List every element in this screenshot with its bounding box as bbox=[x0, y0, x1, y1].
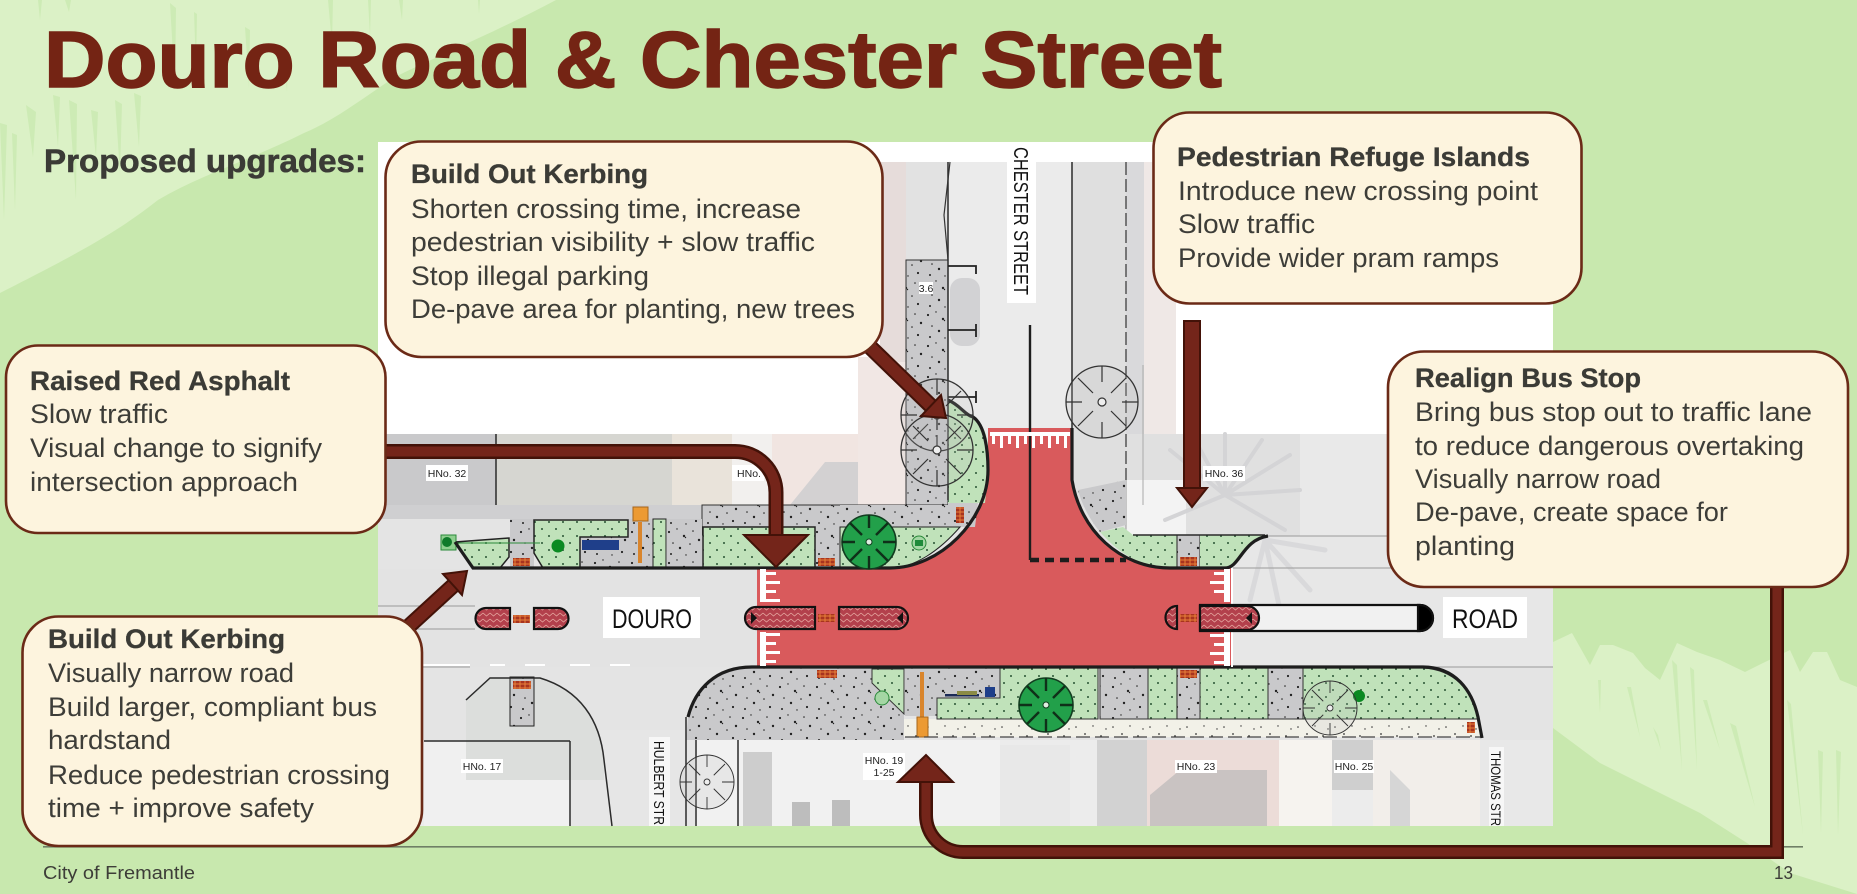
panel: raised red asphalt bbox=[6, 346, 386, 533]
panel: realign bus stop: to reduce dangerous overtaking bbox=[1415, 431, 1804, 461]
plan: aerial photo base bbox=[378, 162, 1553, 826]
panel: build out kerbing, lower: Reduce pedestrian crossing bbox=[48, 760, 390, 790]
label: DOURO: DOURO bbox=[612, 604, 692, 634]
panel: raised red asphalt: intersection approach bbox=[30, 467, 298, 497]
arrow: refuge islands bbox=[1177, 321, 1207, 507]
arrow: upper kerbing build out bbox=[868, 345, 946, 418]
label: CHESTER STREET bbox=[1007, 142, 1036, 303]
panel: pedestrian refuge islands: Pedestrian Refuge Islands bbox=[1177, 142, 1530, 172]
panel: raised red asphalt: Visual change to signify bbox=[30, 433, 323, 463]
panel: pedestrian refuge islands: Provide wider pram ramps bbox=[1178, 243, 1499, 273]
decorative light shape: top left foliage bbox=[0, 0, 556, 293]
label: house numbers: HNo. 17 bbox=[463, 761, 501, 773]
plan: kerb lines bbox=[455, 162, 1482, 738]
panel: pedestrian refuge islands: Introduce new crossing point bbox=[1178, 176, 1539, 206]
footer rule bbox=[43, 846, 1803, 848]
panel: build out kerbing, upper: Stop illegal parking bbox=[411, 261, 649, 291]
panel: build out kerbing, lower: hardstand bbox=[48, 725, 171, 755]
panel: build out kerbing, upper: Shorten crossing time, increase bbox=[411, 194, 801, 224]
label: house numbers: HNo. 23 bbox=[1177, 761, 1215, 773]
arrow: bus stop realignment bbox=[898, 580, 1777, 852]
panel: build out kerbing, lower bbox=[22, 616, 422, 846]
label: HULBERT STREET bbox=[649, 737, 670, 826]
panel: realign bus stop: Realign Bus Stop bbox=[1415, 363, 1641, 393]
panel: realign bus stop: planting bbox=[1415, 531, 1515, 561]
panel: raised red asphalt: Raised Red Asphalt bbox=[30, 366, 290, 396]
label: house numbers: 3.6 bbox=[919, 283, 933, 295]
plan: centre median bbox=[745, 607, 908, 629]
panel: build out kerbing, lower: Build Out Kerbing bbox=[48, 624, 285, 654]
plan: white sheet bbox=[378, 142, 1553, 826]
intersection plan bbox=[378, 142, 1553, 826]
panel: build out kerbing, lower: time + improve safety bbox=[48, 793, 315, 823]
label: house numbers bbox=[426, 282, 1374, 780]
label: house numbers: 1-25 bbox=[873, 767, 895, 779]
plan: red asphalt intersection bbox=[757, 428, 1231, 667]
plan: north-west footpath bbox=[441, 260, 1104, 568]
arrow: lower kerbing build out bbox=[408, 571, 467, 627]
plan: west corner island bbox=[424, 434, 738, 826]
panel: build out kerbing, upper: Build Out Kerbing bbox=[411, 159, 648, 189]
panel: realign bus stop: Bring bus stop out to traffic lane bbox=[1415, 397, 1812, 427]
label: ROAD bbox=[1443, 597, 1527, 638]
plan: crossing comb markings bbox=[760, 432, 1233, 667]
panel: build out kerbing, upper: De-pave area for planting, new trees bbox=[411, 294, 855, 324]
label: ROAD: ROAD bbox=[1452, 604, 1518, 634]
panel: pedestrian refuge islands bbox=[1154, 112, 1582, 304]
page number: 13 bbox=[1774, 863, 1793, 883]
decorative light shape: bottom right foliage bbox=[1553, 633, 1857, 894]
panel: build out kerbing, lower: Build larger, compliant bus bbox=[48, 692, 377, 722]
panel: build out kerbing, lower: Visually narrow road bbox=[48, 658, 294, 688]
plan: east median bbox=[1166, 605, 1433, 631]
title: Douro Road & Chester Street bbox=[44, 15, 1222, 104]
arrow: red asphalt to intersection bbox=[385, 451, 808, 567]
subheading: Proposed upgrades: bbox=[44, 143, 366, 179]
label: house numbers: HNo. 19 bbox=[865, 755, 903, 767]
label: DOURO bbox=[603, 597, 700, 638]
plan: west median bbox=[476, 608, 568, 629]
label: house numbers: HNo. bbox=[737, 468, 761, 480]
panel: build out kerbing, upper: pedestrian visibility + slow traffic bbox=[411, 227, 815, 257]
label: house numbers: HNo. 32 bbox=[428, 468, 466, 480]
panel: raised red asphalt: Slow traffic bbox=[30, 399, 168, 429]
panel: pedestrian refuge islands: Slow traffic bbox=[1178, 209, 1315, 239]
panel: realign bus stop: De-pave, create space for bbox=[1415, 497, 1728, 527]
footer text: City of Fremantle bbox=[43, 863, 195, 883]
label: THOMAS STREET: THOMAS STR bbox=[1488, 751, 1504, 826]
label: house numbers: HNo. 36 bbox=[1205, 468, 1243, 480]
label: house numbers: HNo. 25 bbox=[1335, 761, 1373, 773]
panel: realign bus stop bbox=[1388, 352, 1848, 587]
plan: north-east footpath bbox=[1078, 480, 1265, 568]
icon: trees bbox=[680, 366, 1357, 809]
panel: realign bus stop: Visually narrow road bbox=[1415, 464, 1661, 494]
label: CHESTER STREET: CHESTER STREET bbox=[1009, 147, 1031, 295]
plan: south footpath bbox=[686, 667, 1482, 740]
label: HULBERT STREET: HULBERT STR bbox=[650, 741, 667, 825]
panel: build out kerbing, upper bbox=[386, 142, 882, 357]
